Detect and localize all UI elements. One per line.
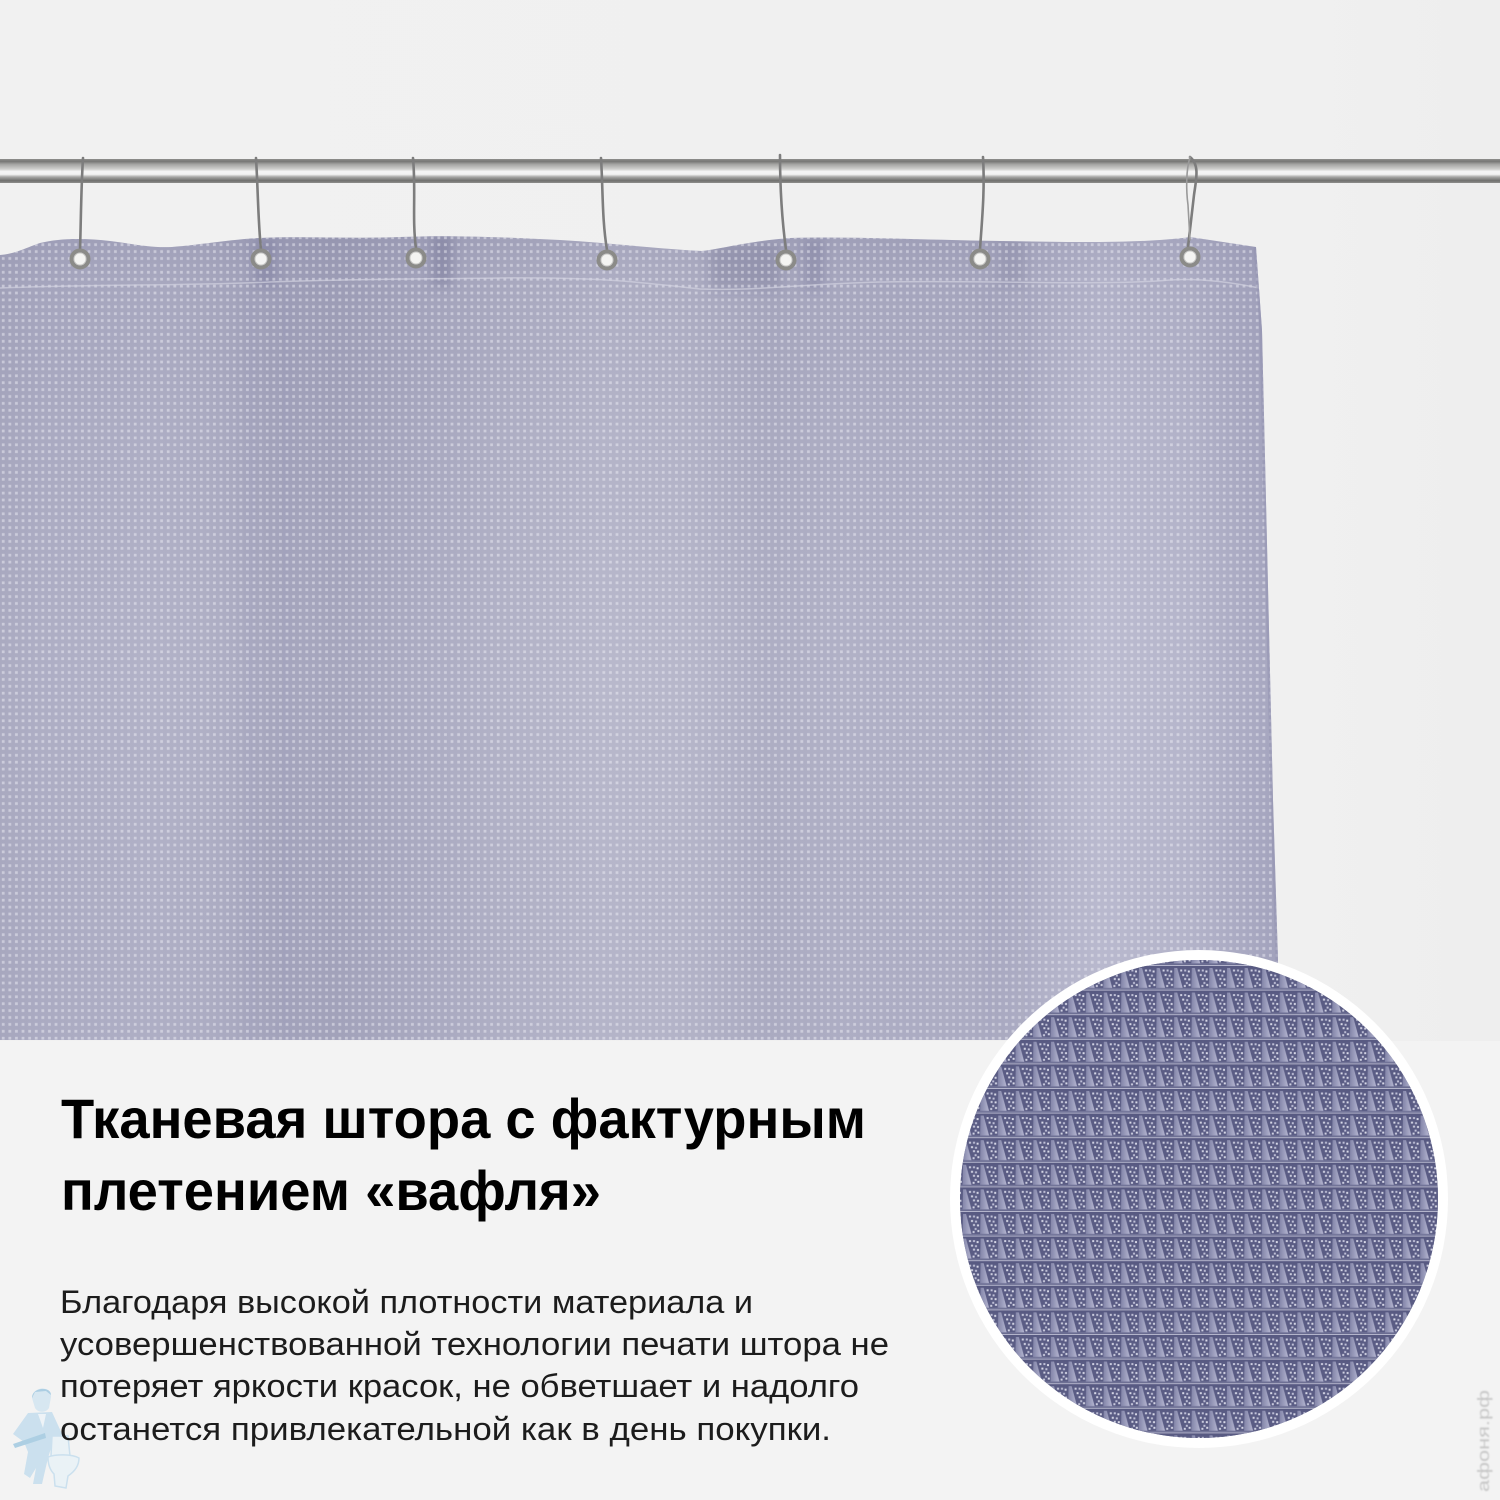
hook 6 [972, 157, 988, 268]
toilet [48, 1436, 79, 1488]
curtain panel [0, 230, 1290, 1040]
curtain hooks and grommets [72, 155, 1198, 268]
hook 1 [72, 158, 88, 268]
watermark text: афоня.рф [1474, 1390, 1493, 1492]
curtain rod [0, 159, 1500, 183]
hook 7 [1182, 157, 1198, 266]
hook 4 [598, 158, 616, 268]
bottom text panel [0, 1041, 1500, 1500]
heading [61, 1087, 866, 1222]
body text: Благодаря высокой плотности материала и [60, 1284, 753, 1320]
hook 5 [778, 155, 794, 268]
plumber figure [13, 1388, 63, 1484]
icon: plumber watermark [13, 1388, 79, 1488]
heading: плетением «вафля» [61, 1159, 601, 1222]
body text: останется привлекательной как в день покупки. [60, 1411, 831, 1447]
hook 3 [408, 158, 424, 266]
heading: Тканевая штора с фактурным [61, 1087, 866, 1150]
body text: потеряет яркости красок, не обветшает и надолго [60, 1368, 859, 1404]
hook 2 [252, 158, 270, 268]
body text: усовершенствованной технологии печати штора не [60, 1326, 889, 1362]
body text [60, 1284, 889, 1447]
circular fabric detail [950, 950, 1448, 1448]
